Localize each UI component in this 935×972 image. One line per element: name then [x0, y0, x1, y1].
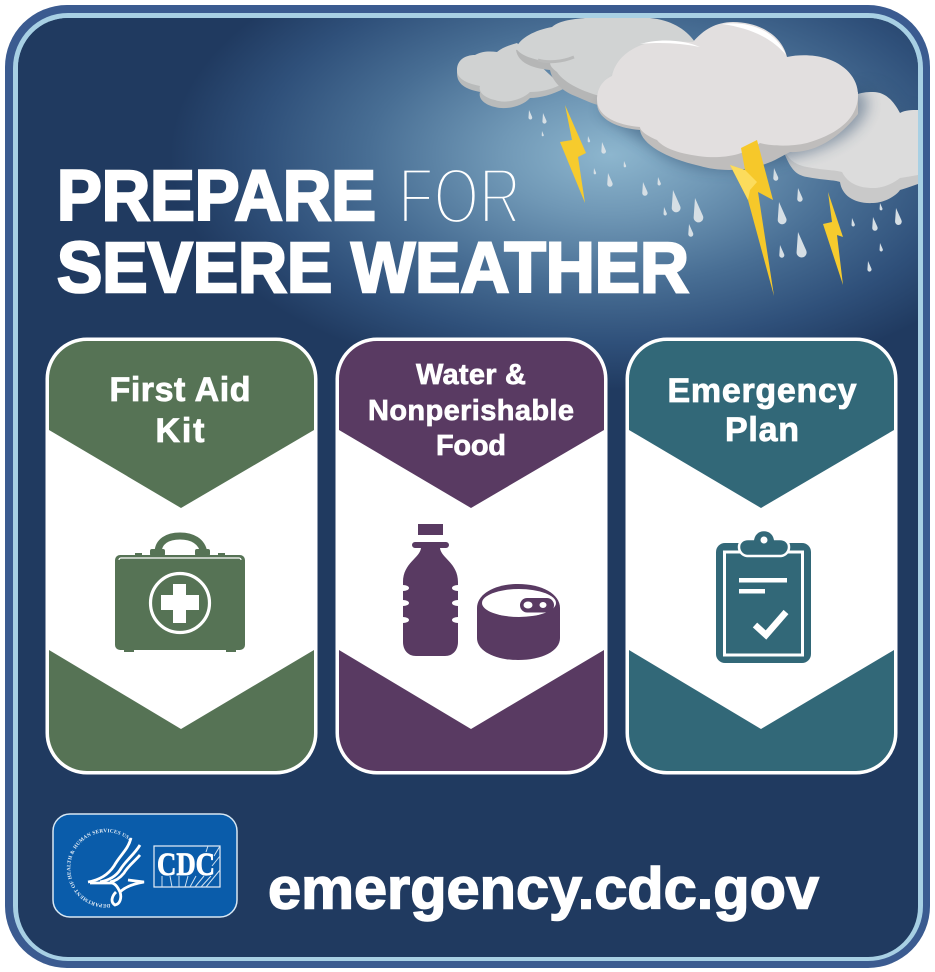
icon: first aid kit: [115, 536, 245, 652]
banner bottom: emergency plan: [629, 650, 894, 771]
title line 2: SEVERE WEATHER: [57, 229, 689, 308]
HHS eagle mark: [88, 838, 144, 905]
CDC logo text: CDC: [157, 847, 215, 883]
cloud: right back cloud: [783, 85, 918, 203]
heading: emergency: Emergency: [668, 372, 857, 410]
panel: water and food: [337, 339, 606, 773]
banner bottom: first aid: [49, 650, 314, 771]
icon: food can: [477, 584, 560, 660]
logo: HHS and CDC badge: [52, 813, 238, 918]
cloud: front main cloud: [597, 22, 858, 157]
heading: food: Food: [436, 430, 506, 462]
cloud: left small cloud: [457, 43, 565, 108]
rain drops: [527, 110, 902, 272]
CDC logo box: [154, 846, 220, 887]
sky glow background: [18, 18, 918, 393]
cloud: front shadow: [598, 92, 875, 174]
panel: first aid kit: [47, 339, 316, 773]
HHS seal ring text: DEPARTMENT OF HEALTH & HUMAN SERVICES USA: [66, 828, 132, 908]
cloud: large back cloud: [516, 18, 700, 106]
heading: plan: Plan: [725, 411, 799, 449]
banner bottom: water and food: [339, 650, 604, 771]
icon: clipboard: [716, 530, 811, 663]
heading: nonperishable: Nonperishable: [368, 395, 574, 427]
storm clouds illustration: [457, 18, 918, 296]
title line 1 bold: PREPARE: [57, 157, 376, 236]
banner top: emergency plan: [629, 341, 894, 508]
lightning: left bolt: [560, 105, 586, 203]
title line 1 light: FOR: [398, 151, 521, 240]
CDC logo rays: [162, 846, 220, 887]
cloud: front extrusion: [597, 92, 858, 170]
banner top: first aid: [49, 341, 314, 508]
panel: emergency plan: [627, 339, 896, 773]
title: [57, 151, 689, 308]
heading: first aid kit: First Aid: [110, 371, 250, 409]
heading: kit: Kit: [156, 412, 204, 450]
icon: bottle: [397, 524, 464, 656]
heading: water: Water &: [416, 359, 526, 391]
lightning: right bolt: [823, 192, 843, 285]
website url: emergency.cdc.gov: [268, 856, 819, 922]
lightning: main bolt: [730, 140, 774, 296]
banner top: water and food: [339, 341, 604, 508]
